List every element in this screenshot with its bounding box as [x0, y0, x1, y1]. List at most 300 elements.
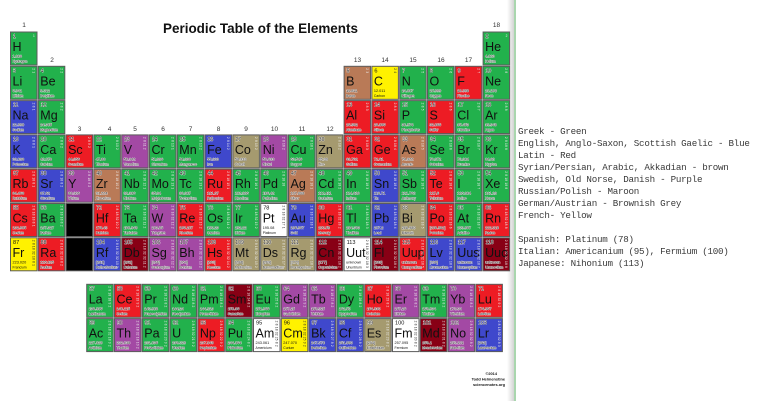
element: Gd	[281, 284, 308, 317]
element: Sr: Sr	[40, 177, 53, 191]
element: Th: Thorium	[116, 346, 129, 350]
element: Au: 79	[291, 206, 297, 212]
element: Ni	[261, 135, 287, 168]
element: Pt: 2 8 18 32 17 1	[282, 206, 286, 229]
element: Ne: Neon	[485, 94, 493, 98]
element: Rg: 2 8 18 32 32 18 1	[310, 240, 314, 268]
element: Ar: 2 8 8	[504, 103, 508, 111]
element: Sm: Sm	[228, 292, 246, 306]
element: Fr: 87	[13, 240, 19, 246]
element: Uus: 2 8 18 32 32 18 7	[476, 240, 480, 268]
element: Sm: Samarium	[228, 312, 243, 316]
element: S: S	[430, 109, 438, 123]
element: Mo: 95.94	[152, 192, 161, 196]
group numbers: 18	[493, 22, 500, 29]
element: Br: Br	[457, 143, 470, 157]
element: Cn: Copernicium	[318, 265, 338, 269]
element: Na: 22.990	[12, 123, 24, 127]
element: Nb: 2 8 18 12 1	[143, 171, 147, 189]
element: Tl: Thallium	[346, 231, 359, 235]
element: Tm: Tm	[422, 292, 440, 306]
element: Md: 101	[423, 321, 431, 327]
element: Zr: Zirconium	[96, 197, 111, 201]
element: F: 18.998	[457, 89, 469, 93]
element: Db: Dubnium	[124, 265, 137, 269]
element: F: 2 7	[476, 68, 480, 73]
element: Zr: Zr	[96, 177, 108, 191]
element: Pb: Lead	[374, 231, 382, 235]
element: Cn: 2 8 18 32 32 18 2	[337, 240, 341, 268]
element: Bi: Bismuth	[402, 231, 414, 235]
element: Ba	[38, 204, 65, 236]
element: Am: Americium	[256, 346, 272, 350]
element: H: Hydrogen	[12, 60, 27, 64]
element: Sc: 2 8 9 2	[87, 137, 91, 148]
element: Tc: 43	[180, 171, 186, 177]
element: Os: Os	[207, 212, 223, 226]
element: Ra: 226.025	[40, 260, 54, 264]
element: Hs: 108	[208, 240, 216, 246]
element: Os: Osmium	[207, 231, 220, 235]
element: I: 53	[458, 171, 464, 177]
element: Au: Gold	[290, 231, 298, 235]
element: Be: Be	[40, 74, 56, 88]
element: Mn: Manganese	[179, 162, 197, 166]
lanthanide series	[87, 284, 502, 317]
element: Ce: 58	[117, 286, 123, 292]
element: Pt: Platinum	[263, 231, 276, 235]
element: O: Oxygen	[430, 94, 441, 98]
element: Rn: Radon	[485, 231, 495, 235]
element: Na	[10, 101, 37, 134]
element: Nb: 92.906	[124, 192, 135, 196]
element: Ta: Ta	[124, 212, 137, 226]
element: Kr: 84.80	[485, 157, 495, 161]
element: Rf: 104	[96, 240, 105, 246]
element: Ds: Darmstadtium	[263, 265, 284, 269]
element: Th: 2 8 18 32 18 10 2	[136, 321, 140, 349]
element: No: 259.101	[450, 341, 464, 345]
element: Lv: 116	[430, 240, 438, 246]
element: Co: 27	[235, 137, 241, 143]
group numbers: 14	[381, 57, 389, 64]
element: La	[87, 284, 113, 317]
element: Cn: [277]	[318, 260, 327, 264]
element: Ge: 72.61	[374, 157, 383, 161]
element: Uuo: 118	[486, 240, 494, 246]
element: He	[483, 32, 510, 65]
element: He: He	[485, 40, 501, 54]
element: Nd: 144.24	[172, 307, 184, 311]
element: Ba: 137.327	[40, 226, 54, 230]
element: Sr: Strontium	[40, 197, 55, 201]
element: Cf: 251.080	[339, 341, 353, 345]
element: Bk: 97	[312, 321, 317, 327]
element: Pa: Protactinium	[144, 346, 163, 350]
element: Y	[66, 169, 93, 202]
element: N: Nitrogen	[402, 94, 415, 98]
element: Pm: Pm	[200, 292, 219, 306]
element: Db: Db	[124, 246, 140, 260]
element: Ds: [269]	[263, 260, 271, 264]
element: Sc: Scandium	[68, 162, 83, 166]
element: Tb: 65	[312, 286, 317, 292]
element: Tb: 2 8 18 27 8 2	[330, 286, 334, 308]
element: Yb: Yb	[450, 292, 465, 306]
element: He: 2	[486, 34, 489, 40]
element: Ar: 39.948	[485, 123, 497, 127]
element: Uus: 117	[458, 240, 466, 246]
element: Lv: 2 8 18 32 32 18 6	[448, 240, 452, 268]
element: Se	[428, 135, 454, 168]
element: Yb: 173.04	[450, 307, 462, 311]
element: Ta: Tantalum	[124, 231, 138, 235]
element: Gd: 64	[284, 286, 290, 292]
element: Pb: 82	[374, 206, 380, 212]
element: Gd: 2 8 18 25 9 2	[302, 286, 306, 308]
element: La: 138.906	[89, 307, 102, 311]
element: Mn: 2 8 13 2	[198, 137, 202, 150]
element: Am: 95	[256, 321, 262, 327]
element: Bi: 2 8 18 32 18 5	[421, 206, 425, 229]
element: Ho: Holmium	[367, 312, 380, 316]
element: Si: Silicon	[374, 128, 384, 132]
element: Pm: 61	[200, 286, 206, 292]
element: P: 2 8 5	[421, 103, 425, 111]
element: Ir: 2 8 18 32 15 2	[254, 206, 258, 229]
element: Cr: Chromium	[152, 162, 167, 166]
element: Si: 14	[374, 103, 380, 109]
element: N: N	[402, 74, 411, 88]
element: Rb: Rubidium	[12, 197, 27, 201]
element: Si: 2 8 4	[393, 103, 397, 111]
group numbers: 8	[217, 126, 221, 133]
element: Pb	[372, 204, 398, 236]
element: Ag: 2 8 18 18 1	[310, 171, 314, 189]
element: Uuo	[483, 238, 510, 271]
element: Sn	[372, 169, 398, 202]
element: B: 2 3	[365, 68, 369, 73]
element: Rg: Roentgenium	[290, 265, 311, 269]
element: Mn: Mn	[179, 143, 197, 157]
element: Bk: Bk	[311, 327, 326, 341]
element: W	[150, 204, 176, 236]
element: Th: 90	[117, 321, 123, 327]
element: Te: Tellurium	[430, 197, 443, 201]
element: Cf: 2 8 18 32 28 8 2	[358, 321, 362, 347]
element: Xe	[483, 169, 510, 202]
element: At: 85	[458, 206, 464, 212]
credit: Todd Helmenstine	[472, 376, 506, 382]
element: Pr: 59	[145, 286, 151, 292]
element: Pd: 46	[263, 171, 269, 177]
element: Bh: 107	[180, 240, 188, 246]
element: Ba: Barium	[40, 231, 51, 235]
element: Li: 3	[13, 68, 16, 74]
element: Ra: Ra	[40, 246, 56, 260]
element: Rg: [272]	[290, 260, 299, 264]
element: Be	[38, 66, 65, 99]
element: V: Vanadium	[124, 162, 139, 166]
element: Mg: Magnesium	[40, 128, 58, 132]
element: Uus	[455, 238, 482, 271]
element: Dy: Dy	[339, 292, 355, 306]
element: I: Iodine	[457, 197, 467, 201]
element: Uut: Uut	[346, 246, 366, 260]
element: Uup: 115	[402, 240, 410, 246]
element: He: 2	[506, 34, 508, 38]
element: Ru: Ru	[207, 177, 223, 191]
element: Sb: 51	[402, 171, 408, 177]
element: W: W	[152, 212, 164, 226]
element: Ra: 88	[41, 240, 47, 246]
element: Es: [254]	[367, 341, 375, 345]
element: B: B	[346, 74, 354, 88]
element: Bh: 2 8 18 32 32 13 2	[198, 240, 202, 268]
element: Po: [208.982]	[430, 226, 445, 230]
group numbers: 4	[108, 126, 112, 133]
element: Be: Beryllium	[40, 94, 54, 98]
element: Ge: 32	[374, 137, 380, 143]
language colour key: English, Anglo-Saxon, Scottish Gaelic - Blue	[518, 138, 750, 149]
element: Rg	[288, 238, 315, 271]
element: Cm: 247.070	[283, 341, 297, 345]
element: Lv: Lv	[430, 246, 443, 260]
element: Tc: Technetium	[179, 197, 197, 201]
element: Rf	[94, 238, 120, 271]
element: Sm: 62	[228, 286, 234, 292]
element: H: 1	[33, 34, 35, 38]
element: Pt: Pt	[263, 212, 275, 226]
element: Pb: 207.2	[374, 226, 383, 230]
element: Rb: 84.468	[12, 192, 24, 196]
element: Uup: Ununpentium	[402, 265, 422, 269]
element: Cd: 2 8 18 18 2	[337, 171, 341, 189]
element: Br: 35	[458, 137, 464, 143]
element: In: 2 8 18 18 3	[365, 171, 369, 189]
element: W: 74	[152, 206, 158, 212]
element: Mo: Mo	[152, 177, 169, 191]
element: Co: 58.933	[235, 157, 247, 161]
element: As: Arsenic	[402, 162, 413, 166]
named-after notes: Japanese: Nihonium (113)	[518, 258, 644, 269]
element: Cr: 24	[152, 137, 158, 143]
element: In: Indium	[346, 197, 356, 201]
element: P	[400, 101, 426, 134]
element: Rh: 102.906	[235, 192, 249, 196]
element: As: 33	[402, 137, 408, 143]
element: O	[428, 66, 454, 99]
element: Pr: Pr	[144, 292, 157, 306]
element: Sg: 2 8 18 32 32 12 2	[170, 240, 174, 268]
element: Ga: Gallium	[346, 162, 358, 166]
element: Rh: 2 8 18 16 1	[254, 171, 258, 189]
language colour key: Swedish, Old Norse, Danish - Purple	[518, 174, 702, 185]
element: Pm	[198, 284, 224, 317]
element: Re: 186.207	[179, 226, 193, 230]
element: Ra	[38, 238, 65, 271]
element: Se: 2 8 18 6	[448, 137, 452, 150]
element: Rh	[233, 169, 259, 202]
element: Ho: 2 8 18 29 8 2	[386, 286, 390, 308]
element: Hg: Mercury	[318, 231, 331, 235]
group numbers: 16	[437, 57, 445, 64]
element: Nb	[122, 169, 148, 202]
element: Pr: Praseodymium	[144, 312, 167, 316]
element: Rn	[483, 204, 510, 236]
element: Ar	[483, 101, 510, 134]
element: Al: Al	[346, 109, 357, 123]
element: U: U	[172, 327, 181, 341]
element: Sr: 38	[41, 171, 47, 177]
element: Po: 84	[430, 206, 436, 212]
element: Cs: 132.905	[12, 226, 26, 230]
element: Sg: Seaborgium	[152, 265, 170, 269]
element: Cu: 63.546	[290, 157, 302, 161]
element: Li	[10, 66, 37, 99]
element: La: La	[89, 292, 103, 306]
element: Db: 105	[124, 240, 133, 246]
element: Zr: 91.224	[96, 192, 108, 196]
element: Mt: Meitnerium	[235, 265, 252, 269]
element: Hf	[94, 204, 120, 236]
element: Bh: [264]	[179, 260, 188, 264]
element: Cd: Cd	[318, 177, 334, 191]
element: At: 209.987	[457, 226, 471, 230]
element: Cl: 35.453	[457, 123, 469, 127]
element: O: 2 6	[448, 68, 452, 73]
element: F: 9	[458, 68, 461, 74]
element: Mg	[38, 101, 65, 134]
element: Ho: 67	[367, 286, 373, 292]
element: Dy: 2 8 18 28 8 2	[358, 286, 362, 308]
named-after notes: Italian: Americanium (95), Fermium (100)	[518, 246, 729, 257]
language colour key: Latin - Red	[518, 150, 576, 161]
language colour key: German/Austrian - Brownish Grey	[518, 198, 682, 209]
group numbers: 6	[161, 126, 165, 133]
element: Th: 232.038	[116, 341, 130, 345]
element: Br: 2 8 18 7	[476, 137, 480, 150]
element: Ga: Ga	[346, 143, 363, 157]
element: Md: 258.1	[422, 341, 432, 345]
element: Si	[372, 101, 398, 134]
element: B	[344, 66, 371, 99]
element: Ca: 40.078	[40, 157, 52, 161]
element: Es: 99	[367, 321, 373, 327]
element: Bh: Bh	[179, 246, 195, 260]
element: Lv: [298]	[430, 260, 438, 264]
element: Nb: Niobium	[124, 197, 136, 201]
element: Pa: 91	[145, 321, 151, 327]
element: Ti: 47.88	[96, 157, 105, 161]
element: Cm: 96	[284, 321, 290, 327]
element: Uut: 2 8 18 32 32 18 3	[365, 240, 369, 268]
element: Ru: Ruthenium	[207, 197, 224, 201]
element: Tl: 2 8 18 32 18 3	[365, 206, 369, 229]
element: Fm	[392, 319, 419, 352]
element: Ru: 2 8 18 15 1	[226, 171, 230, 189]
element: V: V	[124, 143, 133, 157]
element: Fl: 2 8 18 32 32 18 4	[393, 240, 397, 268]
element: Cu: 2 8 18 1	[310, 137, 314, 150]
element: Ta: 180.948	[124, 226, 137, 230]
element: Mo: 42	[152, 171, 158, 177]
element: Er: 68	[395, 286, 401, 292]
element: Ba: Ba	[40, 212, 56, 226]
element: Lv	[428, 238, 454, 271]
element: Yb: 70	[451, 286, 456, 292]
group numbers: 12	[326, 126, 334, 133]
element: Po: 2 8 18 32 18 6	[448, 206, 452, 229]
element: Sb: Antimony	[402, 197, 416, 201]
element: Br: Bromine	[457, 162, 470, 166]
element: Fm: Fm	[394, 327, 413, 341]
element: Rf: Rf	[96, 246, 109, 260]
element: Pt	[261, 204, 287, 236]
element: Lr: [262]	[478, 341, 486, 345]
element: Te	[428, 169, 454, 202]
element: Sr: 87.62	[40, 192, 50, 196]
element: Ho: Ho	[367, 292, 383, 306]
element: Er: Er	[394, 292, 407, 306]
element: Ac	[87, 319, 113, 352]
element: Be: 4	[41, 68, 44, 74]
element: Pr: 2 8 18 21 8 2	[163, 286, 167, 308]
element: Fe: Fe	[207, 143, 222, 157]
element: Cs	[10, 204, 37, 236]
element: Be: 9.012	[40, 89, 50, 93]
element: Ti: Ti	[96, 143, 106, 157]
element: Ga: 2 8 18 3	[365, 137, 369, 150]
element: Al: 2 8 3	[365, 103, 369, 111]
element: Lu: 2 8 18 32 9 2	[497, 286, 501, 308]
element: Co	[233, 135, 259, 168]
element: Tl: 81	[347, 206, 352, 212]
element: Nd: 60	[173, 286, 178, 292]
element: Eu: Europium	[256, 312, 270, 316]
element: Pa: Pa	[144, 327, 160, 341]
element: Ge: Germanium	[374, 162, 392, 166]
element: Mt	[233, 238, 259, 271]
element: Bk: 2 8 18 32 27 8 2	[330, 321, 334, 347]
element: H: H	[12, 40, 22, 54]
element: Po: Polonium	[430, 231, 444, 235]
element: Ir: Iridium	[235, 231, 245, 235]
element: Md: Md	[422, 327, 440, 341]
element: Li: 6.941	[12, 89, 22, 93]
element: Ti: 2 8 10 2	[115, 137, 119, 150]
element: K: 39.098	[12, 157, 24, 161]
element: Ti: 22	[96, 137, 102, 143]
element: Ga: 31	[347, 137, 352, 143]
element: Y: Yttrium	[68, 197, 79, 201]
credit	[472, 371, 506, 387]
element: Na: 2 8 1	[32, 103, 36, 111]
element: Ga	[344, 135, 371, 168]
element: K: K	[12, 143, 22, 157]
element: Dy	[337, 284, 363, 317]
element: Hg: Hg	[318, 212, 334, 226]
element: Rn: Rn	[485, 212, 501, 226]
element: S: 16	[430, 103, 436, 109]
element: V: 2 8 11 2	[143, 137, 147, 150]
element: U: 2 8 18 32 21 9 2	[191, 321, 195, 347]
element: Sg: [266]	[152, 260, 160, 264]
element: Rb: 2 8 18 8 1	[32, 171, 36, 187]
element: Co: Co	[235, 143, 251, 157]
element: Nd: 2 8 18 22 8 2	[191, 286, 195, 308]
actinide series	[87, 319, 502, 352]
